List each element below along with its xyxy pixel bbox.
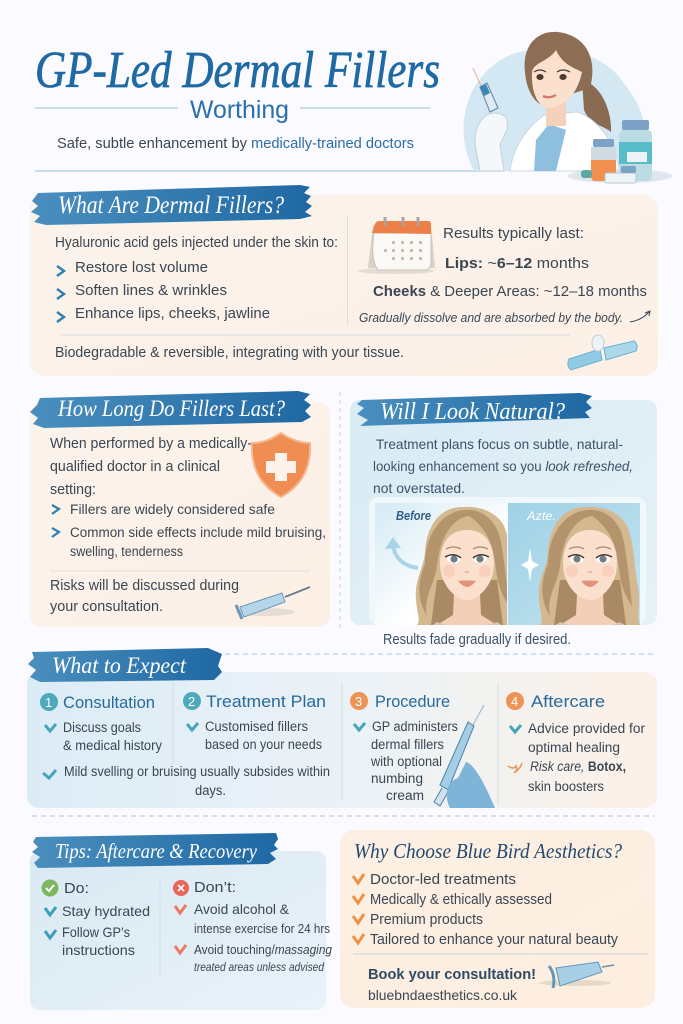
panel: tips aftercare and recovery	[30, 833, 333, 1010]
body text: Treatment plans focus on subtle, natural-	[376, 436, 623, 452]
heading: what to expect: What to Expect	[52, 653, 187, 678]
step 4: aftercare: Aftercare	[531, 692, 605, 711]
intro text: qualified doctor in a clinical	[50, 459, 220, 475]
footer text: Biodegradable & reversible, integrating with your tissue.	[55, 345, 404, 361]
icon: safety shield	[252, 433, 310, 497]
tagline: Safe, subtle enhancement by medically-trained doctors	[57, 135, 414, 152]
reasons list	[353, 872, 619, 948]
heading: will I look natural	[357, 393, 592, 426]
step 2: treatment plan: based on your needs	[205, 737, 322, 752]
step 1: consultation: Consultation	[63, 693, 155, 712]
intro text: When performed by a medically-	[50, 436, 252, 452]
heading: will I look natural: Will I Look Natural?	[380, 399, 565, 425]
step 4: aftercare: optimal healing	[528, 740, 620, 755]
heading: how long do fillers last: How Long Do Fillers Last?	[57, 396, 285, 421]
call to action	[368, 966, 536, 1003]
illustration: doctor with syringe and vials	[464, 32, 672, 183]
heading: how long do fillers last	[30, 391, 311, 428]
results note: Results fade gradually if desired.	[383, 632, 571, 648]
step 2: treatment plan: Customised fillers	[205, 719, 308, 734]
reasons list: Premium products	[370, 912, 483, 928]
don't list	[173, 879, 333, 974]
call to action: bluebndaesthetics.co.uk	[368, 987, 518, 1003]
step 3: procedure: with optional	[370, 754, 442, 769]
step 4: aftercare: Advice provided for	[528, 721, 646, 736]
subtitle: Worthing: Worthing	[190, 96, 289, 124]
step 3: procedure: GP administers	[372, 719, 458, 734]
body text: not overstated.	[373, 480, 465, 496]
step 2: treatment plan: 2	[188, 694, 195, 709]
reasons list: Doctor-led treatments	[370, 872, 516, 888]
step 3: procedure: Procedure	[375, 692, 450, 711]
do list: Stay hydrated	[62, 903, 150, 919]
do list: Follow GP’s	[62, 924, 130, 940]
body text: looking enhancement so you look refreshed,	[373, 458, 633, 474]
heading: tips	[32, 833, 278, 868]
before and after comparison	[369, 497, 646, 628]
body text	[373, 436, 633, 496]
before image	[375, 503, 507, 625]
heading: what are dermal fillers	[31, 185, 312, 225]
risks note	[50, 578, 239, 615]
don't list: Avoid touching/massaging	[194, 942, 333, 957]
intro text: setting:	[50, 482, 96, 498]
risks note: your consultation.	[50, 599, 163, 615]
step 4: aftercare: skin boosters	[528, 779, 604, 794]
step 4: aftercare: Risk care, Botox,	[530, 759, 626, 774]
step 1: consultation: 1	[45, 695, 52, 710]
step 3: procedure: 3	[355, 694, 362, 709]
do list: Do:	[64, 880, 89, 897]
note: mild swelling: Mild svelling or bruising usually subsides within	[64, 764, 330, 779]
do list: instructions	[62, 942, 135, 958]
panel: will I look natural	[350, 393, 657, 628]
benefits list: Enhance lips, cheeks, jawline	[75, 305, 270, 322]
step 4: aftercare: 4	[511, 694, 518, 709]
panel: how long do fillers last	[30, 391, 330, 627]
don't list: Avoid alcohol &	[194, 901, 290, 917]
don't list: intense exercise for 24 hrs	[194, 922, 330, 936]
duration details	[359, 225, 650, 325]
duration details: Results typically last:	[443, 225, 584, 242]
call to action: Book your consultation!	[368, 966, 536, 983]
step 1: consultation: Discuss goals	[63, 720, 141, 735]
step 3: procedure	[350, 692, 458, 803]
icon: syringe	[539, 962, 614, 988]
risks note: Risks will be discussed during	[50, 578, 239, 594]
before image: Before	[396, 508, 431, 523]
icon: gloved hand holding syringe	[434, 705, 495, 808]
safety list: swelling, tenderness	[70, 544, 183, 559]
after image: Azte.	[526, 509, 556, 523]
duration details: Cheeks & Deeper Areas: ~12–18 months	[373, 283, 647, 300]
intro text: Hyaluronic acid gels injected under the skin to:	[55, 235, 338, 251]
panel: why choose blue bird aesthetics	[340, 830, 655, 1008]
duration details: Gradually dissolve and are absorbed by the body.	[359, 310, 623, 325]
step 3: procedure: cream	[386, 788, 424, 803]
step 3: procedure: numbing	[371, 771, 423, 786]
step 2: treatment plan: Treatment Plan	[206, 692, 326, 711]
benefits list	[57, 259, 270, 322]
do list	[42, 880, 150, 958]
icon: capsule vial	[568, 335, 637, 370]
after image	[508, 503, 640, 625]
icon: syringe	[235, 587, 310, 619]
heading: what are dermal fillers: What Are Dermal Fillers?	[58, 192, 284, 219]
safety list: Fillers are widely considered safe	[70, 502, 275, 517]
icon: calendar	[358, 217, 435, 274]
step 1: consultation: & medical history	[63, 738, 162, 753]
panel: what are dermal fillers	[30, 185, 658, 376]
reasons list: Tailored to enhance your natural beauty	[370, 932, 619, 948]
heading: why choose: Why Choose Blue Bird Aesthetics?	[354, 839, 622, 863]
intro text	[50, 436, 252, 498]
heading: what to expect	[28, 648, 222, 682]
note: mild swelling	[43, 764, 330, 798]
safety list: Common side effects include mild bruising,	[70, 525, 326, 540]
don't list: Don’t:	[194, 879, 236, 896]
don't list: treated areas unless advised	[194, 960, 324, 974]
reasons list: Medically & ethically assessed	[370, 892, 552, 908]
heading: tips: Tips: Aftercare & Recovery	[55, 839, 258, 863]
step 2: treatment plan	[183, 692, 326, 752]
title: GP-Led Dermal Fillers	[35, 42, 440, 99]
panel: what to expect	[27, 648, 657, 808]
step 1: consultation	[40, 693, 162, 753]
benefits list: Restore lost volume	[75, 259, 208, 276]
step 4: aftercare	[506, 692, 646, 794]
benefits list: Soften lines & wrinkles	[75, 282, 227, 299]
safety list	[52, 502, 326, 559]
step 3: procedure: dermal fillers	[371, 737, 444, 752]
note: mild swelling: days.	[195, 783, 226, 798]
duration details: Lips: ~6–12 months	[445, 255, 589, 272]
